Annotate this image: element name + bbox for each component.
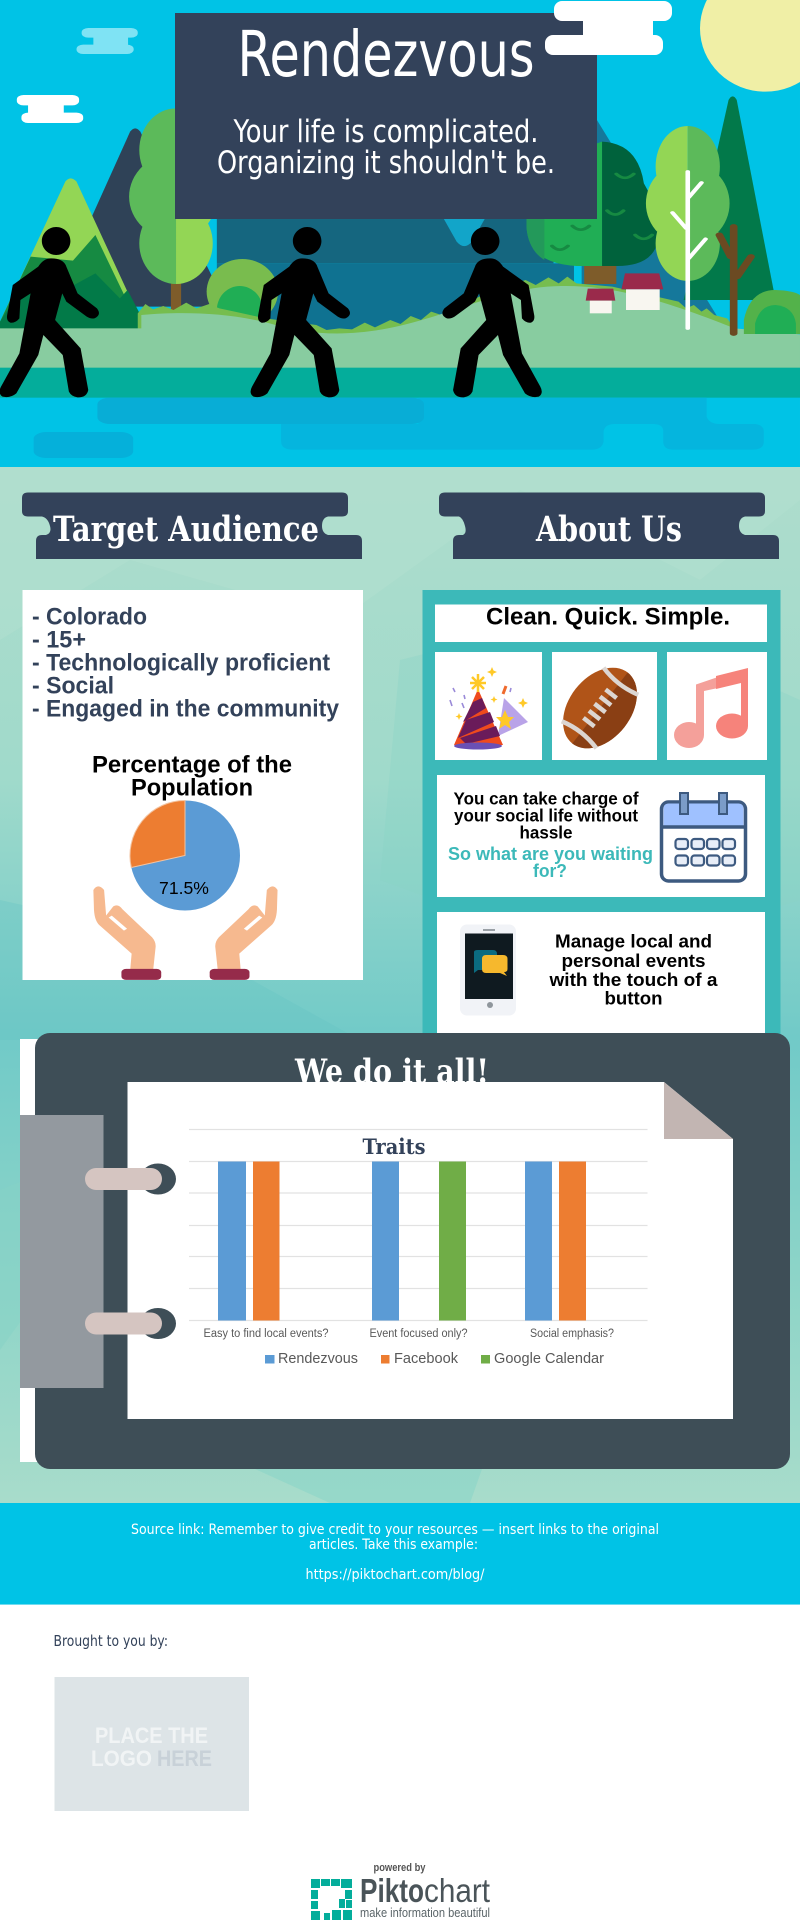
bar chart: traits <box>189 1130 648 1367</box>
paper fold <box>664 1082 733 1139</box>
piktochart logo: chart <box>424 1872 490 1909</box>
pie chart title: Population <box>131 774 253 802</box>
legend: Rendezvous <box>278 1351 358 1367</box>
axis labels: Event focused only? <box>370 1328 468 1340</box>
callout: take charge: You can take charge of <box>454 788 639 808</box>
hero illustration <box>0 0 800 467</box>
callout: manage events: with the touch of a <box>548 970 719 990</box>
legend: Google Calendar <box>494 1351 604 1367</box>
audience list: - Technologically proficient <box>32 650 330 676</box>
lake and mountain centre <box>217 219 574 337</box>
callout: manage events: personal events <box>562 951 706 971</box>
piktochart logo: Pikto <box>360 1872 424 1909</box>
subtitle <box>217 114 555 181</box>
banner: about us <box>439 492 779 559</box>
pie chart: 71.5% <box>159 878 209 898</box>
white cloud top right <box>545 1 672 55</box>
bars <box>218 1162 586 1320</box>
call to action <box>448 843 653 881</box>
person walking centre <box>251 227 350 397</box>
mountain dark left <box>84 128 227 307</box>
logo placeholder: LOGO <box>91 1746 152 1771</box>
title panel <box>175 13 597 219</box>
teal band <box>0 368 800 398</box>
binder clip <box>20 1115 104 1388</box>
piktochart logo: powered by <box>374 1862 426 1874</box>
green mountain left <box>0 178 141 328</box>
axis labels: Easy to find local events? <box>204 1328 328 1340</box>
subtitle: Your life is complicated. <box>233 114 538 150</box>
source link band: articles. Take this example: <box>309 1537 478 1553</box>
icon: football <box>548 652 657 763</box>
audience list: - Colorado <box>32 604 147 630</box>
tagline box <box>435 604 767 642</box>
brown bare tree <box>719 227 751 333</box>
audience list: - Engaged in the community <box>32 696 340 722</box>
panel: target audience <box>22 590 363 980</box>
call to action: So what are you waiting <box>448 843 653 864</box>
houses <box>586 273 663 313</box>
clipboard board <box>35 1033 790 1469</box>
callout: manage events: Manage local and <box>555 932 712 952</box>
piktochart logo: make information beautiful <box>360 1906 490 1920</box>
callout: take charge: your social life without <box>454 806 638 826</box>
audience list: - Social <box>32 672 114 700</box>
logo placeholder <box>54 1677 249 1811</box>
callout: manage events: button <box>604 988 662 1008</box>
callout: take charge: hassle <box>520 822 573 842</box>
logo mark <box>311 1879 352 1920</box>
axis labels: Social emphasis? <box>530 1328 614 1340</box>
source link band <box>0 1503 800 1605</box>
binder ring bottom <box>85 1308 176 1339</box>
person facing left <box>442 227 542 397</box>
water reflections <box>34 398 764 458</box>
legend: Facebook <box>394 1351 459 1367</box>
audience list: - 15+ <box>32 626 86 654</box>
source link band: Source link: Remember to give credit to your resources — insert links to the original <box>131 1522 659 1538</box>
person walking left <box>0 227 99 397</box>
audience list <box>32 604 340 722</box>
tall dark tree right <box>684 96 776 300</box>
icon: hands <box>93 886 278 980</box>
tree left <box>129 108 217 333</box>
heading: we do it all: We do it all! <box>294 1052 489 1092</box>
white cloud left <box>17 95 83 123</box>
subtitle: Organizing it shouldn't be. <box>217 145 555 181</box>
pie chart title <box>92 752 292 802</box>
callout: take charge <box>437 775 765 897</box>
logo placeholder: HERE <box>157 1746 212 1771</box>
pie chart title: Percentage of the <box>92 752 292 778</box>
ground hills <box>0 286 800 370</box>
title: Rendezvous <box>238 18 534 91</box>
mint background section <box>0 467 800 1503</box>
logo placeholder: PLACE THE <box>95 1723 208 1748</box>
piktochart logo <box>311 1862 490 1920</box>
tree right with white branches <box>646 126 730 328</box>
bush right <box>744 290 800 334</box>
brought to you by: Brought to you by: <box>54 1632 168 1650</box>
chart title: Traits <box>362 1134 426 1159</box>
bushes <box>207 259 278 334</box>
icon: phone <box>460 924 516 1016</box>
icon: party hat <box>435 652 542 760</box>
legend <box>265 1351 604 1367</box>
tagline box: Clean. Quick. Simple. <box>486 604 730 630</box>
light cloud <box>77 28 138 54</box>
binder ring top <box>85 1164 176 1194</box>
banner: target audience <box>22 492 362 559</box>
grass zigzag <box>138 277 735 337</box>
panel: about us <box>422 590 780 1042</box>
paper sheet <box>128 1082 733 1419</box>
round tree right <box>527 142 659 284</box>
mountain right blue <box>582 120 719 320</box>
callout: manage events <box>437 912 765 1042</box>
white footer <box>0 1605 800 1932</box>
call to action: for? <box>533 860 567 881</box>
banner: target audience: Target Audience <box>53 509 319 550</box>
icon: calendar <box>662 793 746 881</box>
clipboard section <box>20 1033 790 1469</box>
source link band: https://piktochart.com/blog/ <box>306 1567 485 1583</box>
sun <box>700 0 800 92</box>
pie chart <box>130 800 240 910</box>
icon: music note <box>667 652 767 760</box>
axis labels <box>204 1328 614 1340</box>
banner: about us: About Us <box>535 509 682 550</box>
